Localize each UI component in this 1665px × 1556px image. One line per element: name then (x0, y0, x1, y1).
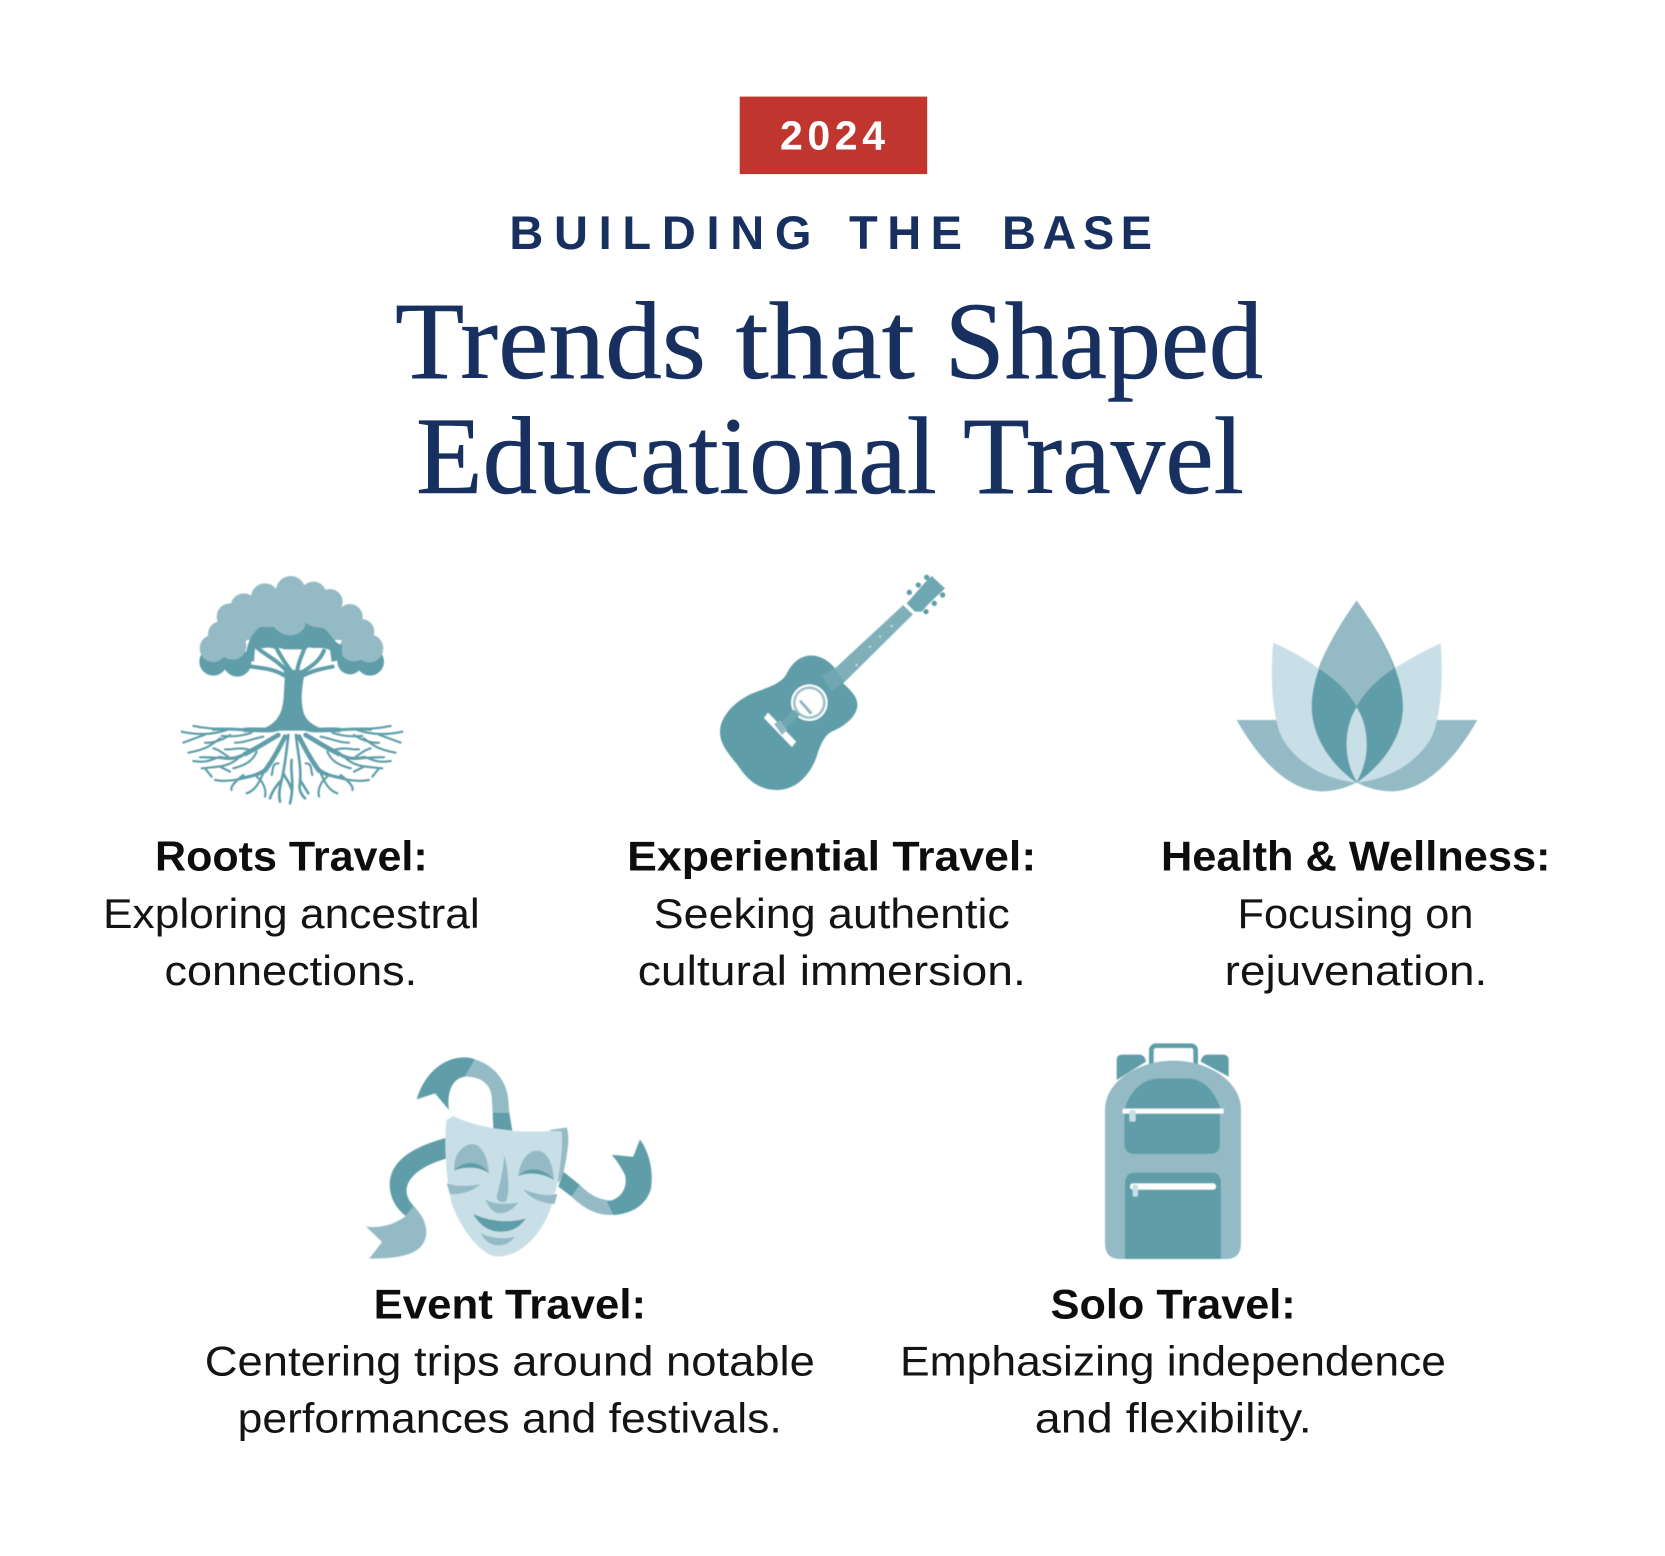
text: solo travel (900, 1280, 1446, 1442)
text: health and wellness (1161, 832, 1550, 994)
text: solo travel: Emphasizing independence (900, 1338, 1446, 1384)
text: health and wellness: rejuvenation. (1225, 947, 1487, 994)
eyebrow heading (509, 206, 1152, 259)
text: solo travel: and flexibility. (1035, 1394, 1312, 1442)
title: Shaped (945, 280, 1263, 402)
text: experiential travel: Seeking authentic (654, 890, 1010, 937)
icon: tree with roots (182, 576, 402, 803)
title: Trends (395, 280, 706, 402)
year badge (740, 97, 927, 174)
light canopy (200, 576, 383, 662)
panel: event travel (205, 1057, 815, 1442)
text: roots travel: Exploring ancestral (103, 890, 480, 937)
text: health and wellness: Focusing on (1238, 890, 1474, 937)
title: Educational (416, 395, 937, 517)
icon: theatre mask with ribbons (366, 1057, 652, 1259)
title: that (736, 280, 915, 402)
eyebrow heading: BASE (1002, 206, 1152, 259)
text: experiential travel: cultural immersion. (638, 947, 1026, 994)
panel: roots travel (103, 576, 480, 994)
eyebrow heading: THE (849, 206, 962, 259)
eyebrow heading: BUILDING (509, 206, 811, 259)
title (395, 280, 1263, 517)
text: health and wellness: Health & Wellness: (1161, 832, 1550, 880)
text: event travel: Event Travel: (374, 1280, 646, 1328)
text: solo travel: Solo Travel: (1051, 1280, 1296, 1328)
text: event travel (205, 1280, 815, 1442)
icon: backpack (1105, 1046, 1241, 1259)
icon: lotus flower (1237, 601, 1477, 791)
text: experiential travel: Experiential Travel: (627, 832, 1036, 880)
year badge: 2024 (780, 112, 885, 158)
text: event travel: Centering trips around notable (205, 1338, 815, 1384)
panel: experiential travel (627, 575, 1036, 994)
text: roots travel (103, 832, 480, 994)
icon: acoustic guitar (720, 575, 945, 790)
text: roots travel: connections. (164, 947, 417, 994)
panel: solo travel (900, 1046, 1446, 1442)
text: event travel: performances and festivals. (238, 1394, 782, 1442)
text: roots travel: Roots Travel: (155, 832, 428, 880)
panel: health and wellness (1161, 601, 1550, 994)
text: experiential travel (627, 832, 1036, 994)
title: Travel (963, 395, 1244, 517)
